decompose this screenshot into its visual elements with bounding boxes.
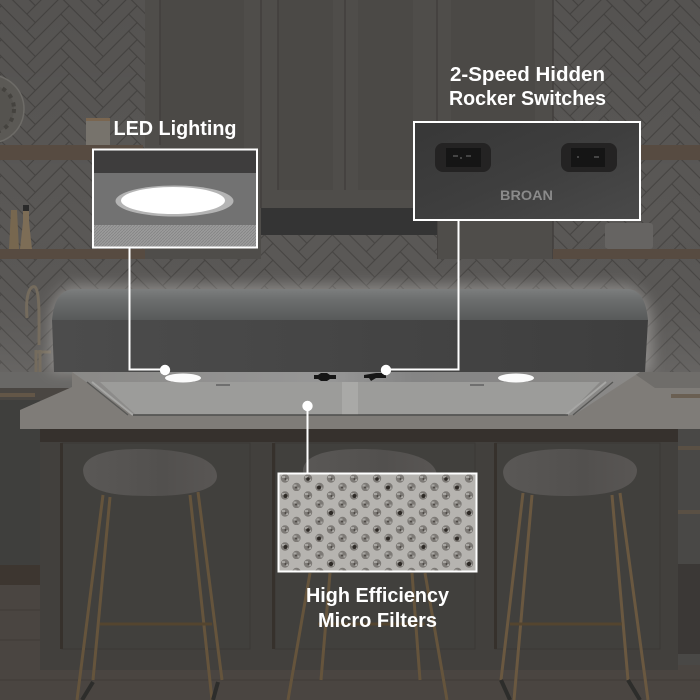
filter frame bevels xyxy=(92,382,606,415)
callout connector: LED xyxy=(130,248,170,375)
panel: LED lighting closeup xyxy=(93,150,257,248)
LED lens closeup xyxy=(116,186,234,216)
counter right ledge xyxy=(632,372,700,388)
knob left xyxy=(314,373,336,381)
LED light right xyxy=(498,374,534,382)
underside panel xyxy=(72,372,640,415)
jar on shelf xyxy=(86,118,110,145)
counter right tan trim xyxy=(671,394,700,398)
filter panel right xyxy=(358,382,600,414)
heading: micro filters: Micro Filters xyxy=(318,610,437,632)
right side lower cabinets xyxy=(678,372,700,665)
filter frame strips xyxy=(87,382,613,415)
heading: micro filters: High Efficiency xyxy=(306,585,450,607)
wooden shelves xyxy=(0,145,700,259)
heading: micro filters xyxy=(306,585,450,632)
faucet xyxy=(27,287,51,372)
filter panel left xyxy=(100,382,342,414)
box on right shelf xyxy=(605,223,653,249)
panel: micro filter closeup xyxy=(278,474,476,572)
floor xyxy=(0,565,700,700)
upper cabinets xyxy=(145,0,553,290)
hood upper band xyxy=(52,289,648,320)
LED light left xyxy=(165,374,201,382)
stool middle xyxy=(288,449,447,700)
panel: rocker switches closeup xyxy=(414,122,640,220)
callout connector: filters xyxy=(302,401,313,473)
lower left wall and ledge xyxy=(0,372,72,565)
hood highlight edge xyxy=(68,288,634,290)
rocker switch left xyxy=(435,143,491,172)
knob right xyxy=(364,373,386,381)
rocker switch right xyxy=(561,143,617,172)
screws xyxy=(216,384,484,386)
island base cabinet xyxy=(40,429,678,670)
hood brushed front xyxy=(52,320,648,372)
wall light shading xyxy=(0,0,700,380)
center divider xyxy=(342,382,358,415)
brand logo: BROAN xyxy=(500,188,553,203)
background: tiled kitchen wall xyxy=(0,0,700,380)
heading: rocker switches: 2-Speed Hidden xyxy=(450,64,605,86)
heading: rocker switches: Rocker Switches xyxy=(449,88,606,110)
range hood xyxy=(52,289,648,415)
heading: rocker switches xyxy=(449,64,606,110)
countertop xyxy=(20,372,700,429)
bottles on shelf xyxy=(9,205,32,249)
stool right xyxy=(501,449,648,700)
filter bottom edge xyxy=(133,414,568,416)
callout connector: switches xyxy=(381,220,458,375)
decorative plate xyxy=(0,75,24,143)
heading: LED Lighting: LED Lighting xyxy=(114,118,236,140)
hood glow xyxy=(50,285,652,372)
stool left xyxy=(77,449,222,700)
